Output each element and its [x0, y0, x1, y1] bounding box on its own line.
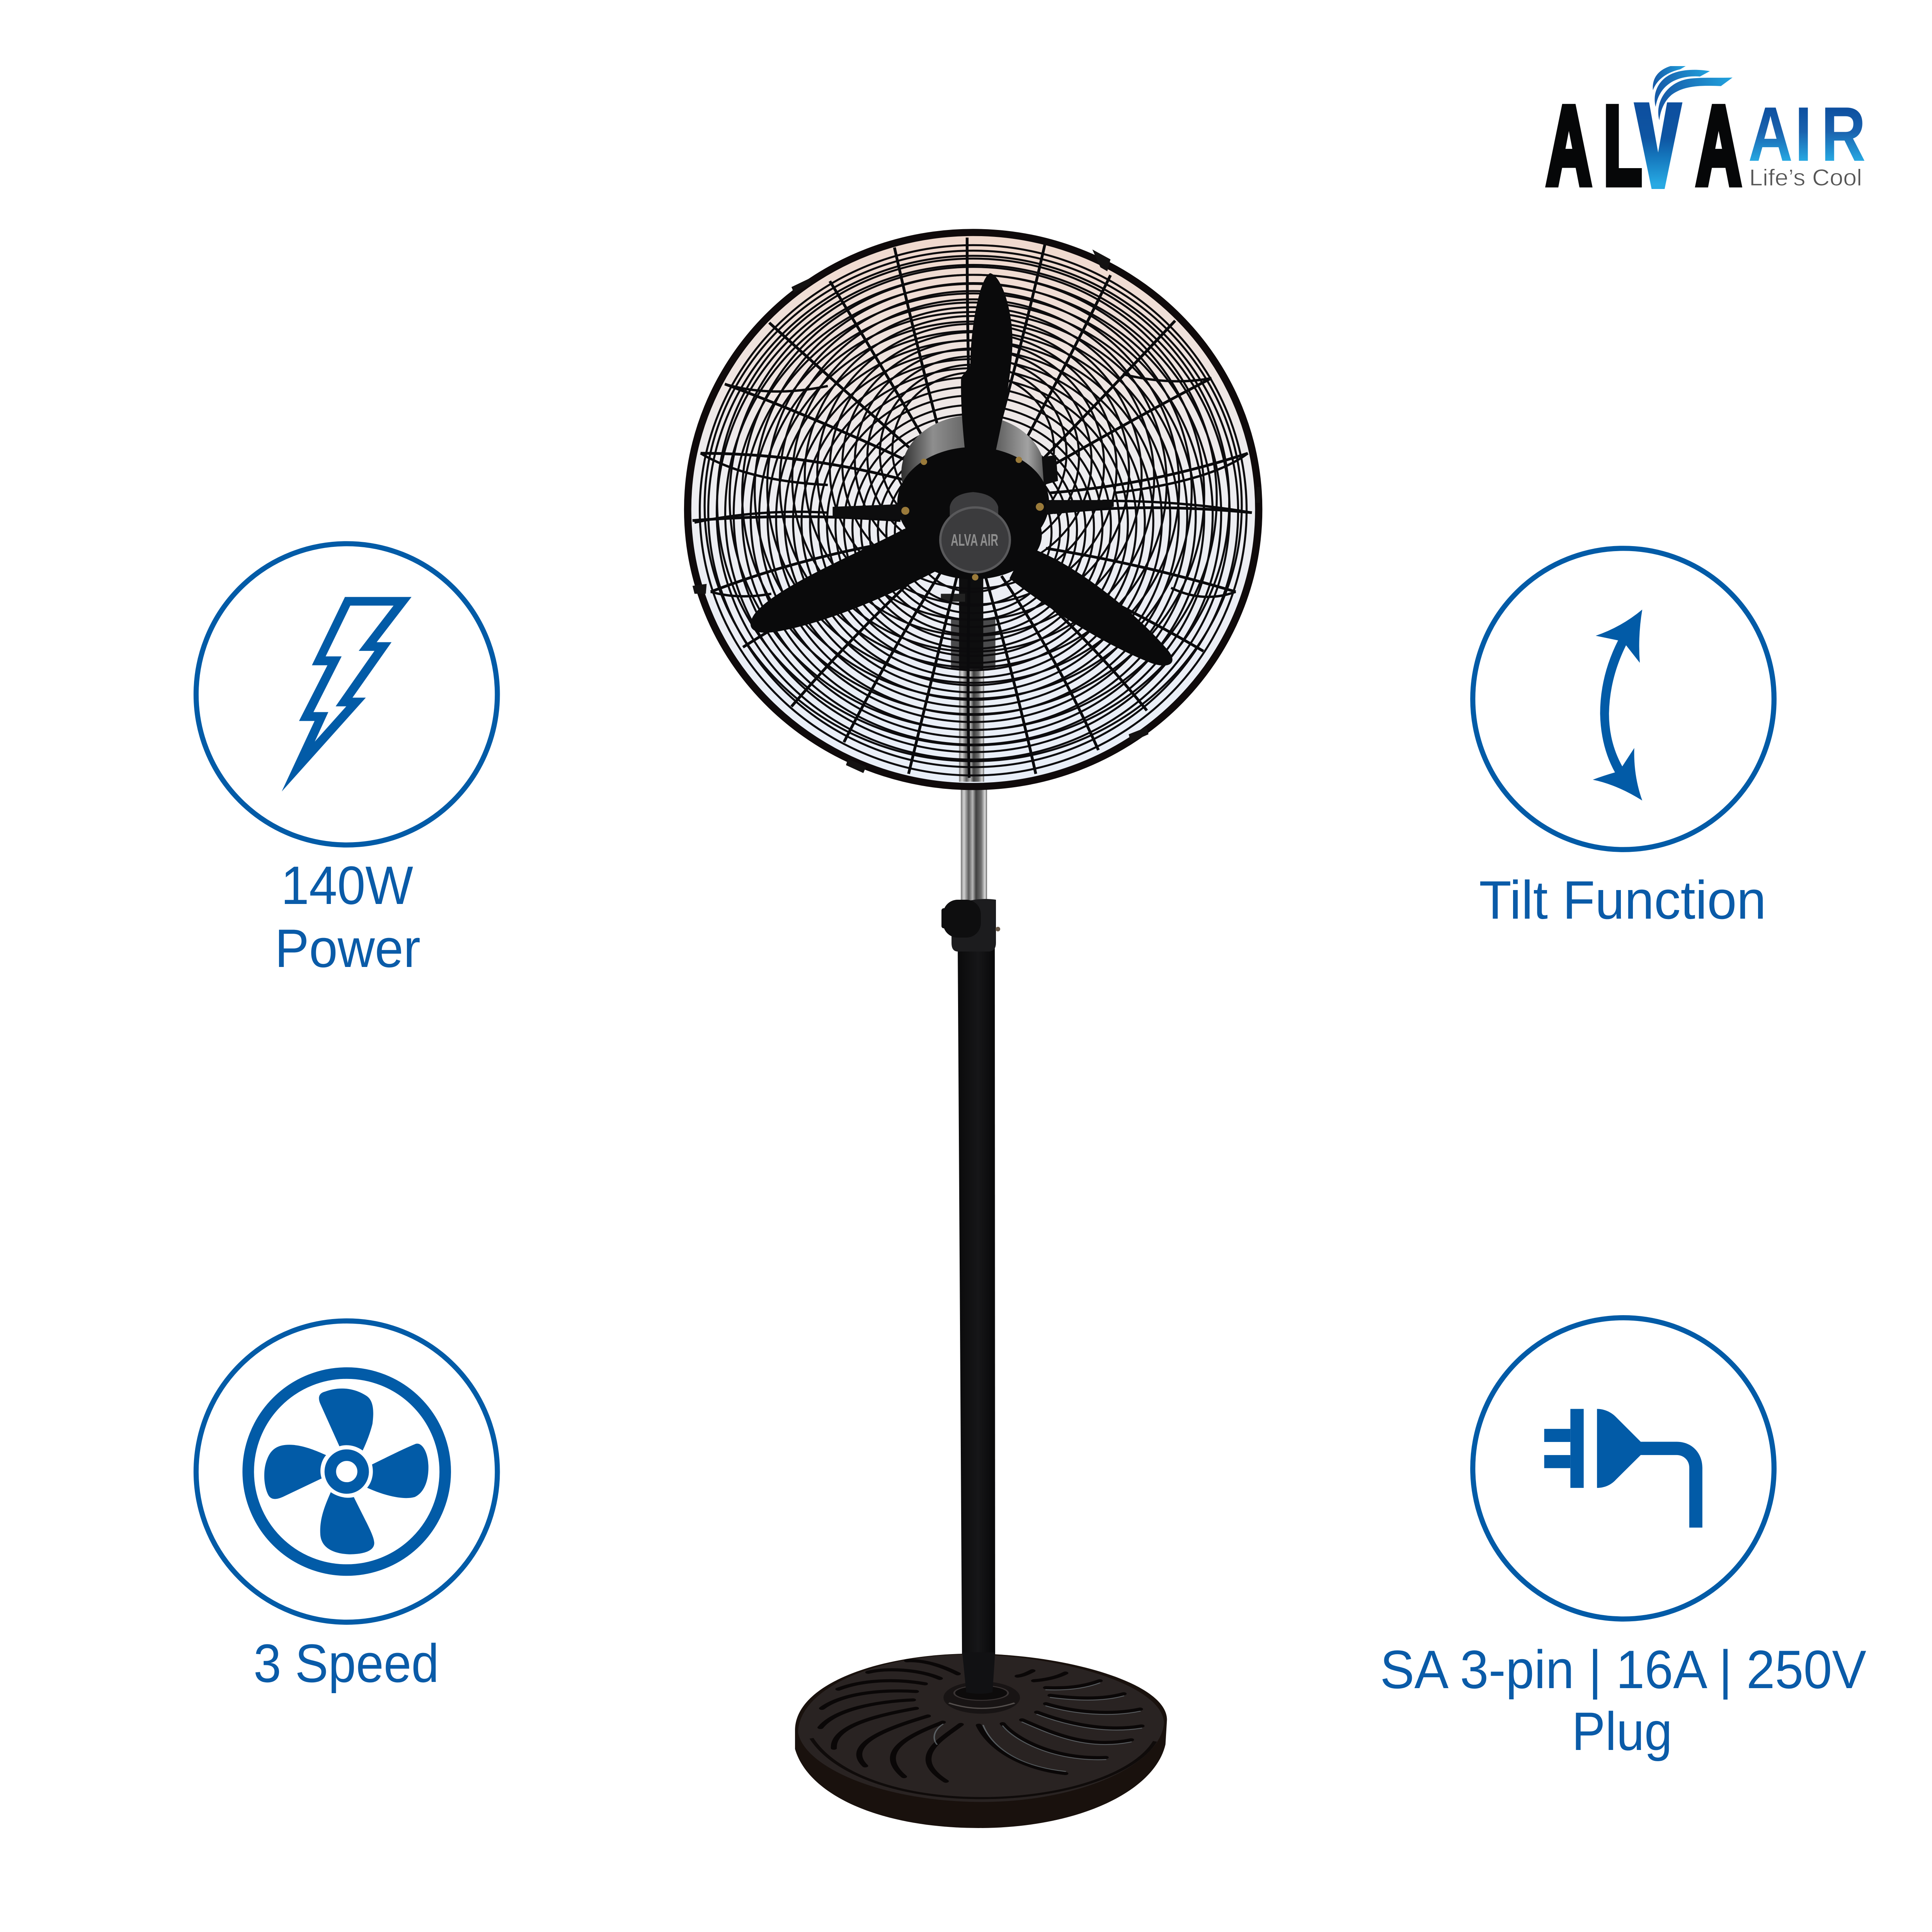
fan blades — [751, 273, 1173, 666]
fan guard — [688, 232, 1261, 786]
label: 140W Power: 140W — [281, 855, 413, 916]
feature: 140W power — [196, 544, 497, 979]
base ridge highlights — [934, 1683, 1142, 1771]
logo swoosh wings — [1653, 66, 1733, 120]
logo: Alva Air — [1546, 66, 1866, 208]
hub badge with brand — [940, 507, 1010, 572]
logo tagline: Life’s Cool — [1749, 165, 1862, 191]
icon: curved double arrow in circle — [1473, 548, 1774, 849]
icon: fan in circle — [196, 1321, 497, 1622]
fan pole: black lower section — [958, 943, 995, 1708]
pole socket boss — [943, 1682, 1020, 1714]
guard clips — [693, 250, 1261, 773]
guard interior background — [688, 233, 1258, 786]
label: plug specification: SA 3-pin | 16A | 250V — [1380, 1639, 1866, 1700]
height adjustment collar and knob — [941, 899, 1000, 952]
feature: 3 speed — [196, 1321, 497, 1694]
logo wordmark ALVA: ALVA — [1546, 84, 1741, 208]
feature: SA plug — [1380, 1318, 1866, 1762]
motor and blades — [751, 273, 1173, 666]
label: 140W Power: Power — [275, 918, 420, 979]
hub spinner — [950, 492, 998, 517]
guard rings — [700, 245, 1247, 775]
label: plug specification — [1380, 1639, 1866, 1762]
label: Tilt Function: Tilt Function — [1479, 870, 1766, 930]
guard outer rim — [688, 232, 1259, 786]
guard cross arcs — [694, 374, 1252, 597]
icon: lightning bolt in circle — [196, 544, 497, 845]
base rim highlight — [812, 1738, 1155, 1798]
logo wordmark AIR: AIR — [1748, 91, 1866, 177]
label: 3 Speed: 3 Speed — [254, 1633, 439, 1694]
base swirl ridges — [820, 1661, 1142, 1781]
fan base — [795, 1652, 1167, 1828]
base top surface — [798, 1655, 1164, 1802]
icon: plug in circle — [1473, 1318, 1774, 1619]
hub shadow disc — [904, 490, 1042, 579]
label: 140W Power — [275, 855, 420, 979]
motor silver housing — [901, 415, 1045, 531]
head stem behind guard — [941, 572, 996, 782]
label: plug specification: Plug — [1572, 1701, 1672, 1762]
brass screws — [901, 457, 1044, 580]
guard spokes — [693, 238, 1252, 778]
hub badge with brand: ALVA AIR — [951, 531, 998, 550]
motor dark body — [897, 447, 1049, 558]
fan pole: chrome upper section — [961, 785, 987, 904]
feature: tilt function — [1473, 548, 1774, 930]
product photo: pedestal fan — [688, 232, 1261, 1828]
base body — [795, 1654, 1167, 1828]
motor mounting arms — [832, 455, 1114, 520]
